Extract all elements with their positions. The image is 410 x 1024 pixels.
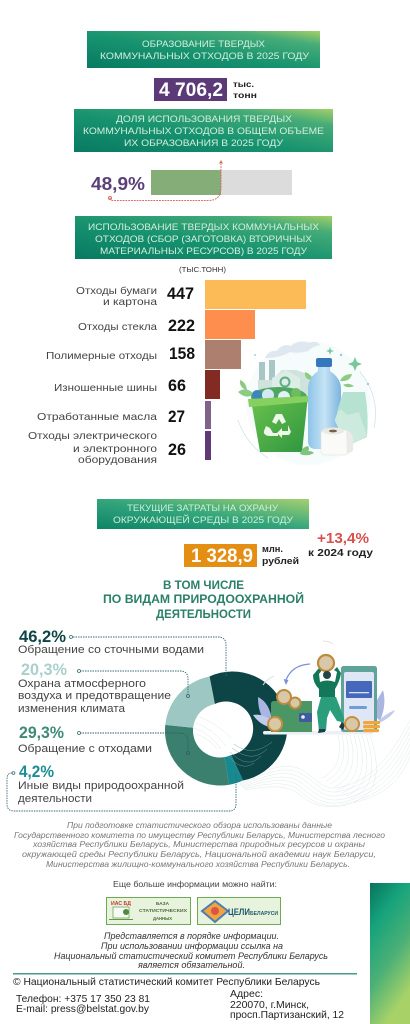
stat: 1 328,9 million roubles: млн. xyxy=(262,544,283,554)
row: glass: 222 xyxy=(168,316,195,335)
logo: statistics database: СТАТИСТИЧЕСКИХ xyxy=(139,908,187,913)
decorative green side panel xyxy=(370,883,410,1024)
stat: 4 706,2 thousand tonnes: тыс. xyxy=(233,79,254,89)
row: oils: Отработанные масла xyxy=(37,411,157,423)
header: environmental costs: ОКРУЖАЮЩЕЙ СРЕДЫ В 2025 ГОДУ xyxy=(113,514,293,525)
header: share of waste use: КОММУНАЛЬНЫХ ОТХОДОВ В ОБЩЕМ ОБЪЕМЕ xyxy=(83,126,324,137)
text block: data sources xyxy=(14,820,385,869)
row: polymers: 158 xyxy=(169,344,195,363)
header: use of secondary materials: МАТЕРИАЛЬНЫХ РЕСУРСОВ) В 2025 ГОДУ xyxy=(100,246,308,257)
contacts: phone and email: E-mail: press@belstat.gov.by xyxy=(16,1003,150,1015)
header: share of waste use: ДОЛЯ ИСПОЛЬЗОВАНИЯ ТВЕРДЫХ xyxy=(116,114,293,125)
logo: sustainable development goals xyxy=(198,898,280,924)
header: use of secondary materials: ОТХОДОВ (СБОР (ЗАГОТОВКА) ВТОРИЧНЫХ xyxy=(95,234,313,245)
subheading: by type of activity xyxy=(103,578,304,621)
callout: atmosphere 20,3%: изменения климата xyxy=(18,703,126,715)
header: environmental costs: ТЕКУЩИЕ ЗАТРАТЫ НА ОХРАНУ xyxy=(127,503,278,513)
callout: wastewater 46,2%: 46,2% xyxy=(19,628,66,646)
row: tyres: 66 xyxy=(168,376,186,395)
unit note: (ТЫС.ТОНН) xyxy=(179,265,227,274)
logo: statistics database: ДАННЫХ xyxy=(153,916,172,921)
row: paper: Отходы бумаги xyxy=(76,285,157,297)
text block: usage note xyxy=(54,931,328,971)
text: more information: Еще больше информации можно найти: xyxy=(113,879,277,889)
row: paper: 447 xyxy=(167,284,194,303)
copyright: © Национальный статистический комитет Республики Беларусь xyxy=(13,976,321,988)
logo: statistics database: БАЗА xyxy=(156,901,170,906)
contacts: address: 220070, г.Минск, xyxy=(230,999,309,1011)
header: waste generation: КОММУНАЛЬНЫХ ОТХОДОВ В 2025 ГОДУ xyxy=(100,51,310,62)
header: share of waste use xyxy=(74,109,333,152)
row: paper xyxy=(76,280,306,309)
donut chart: environmental costs xyxy=(165,671,287,786)
header: environmental costs xyxy=(97,499,309,529)
row: electronics xyxy=(28,430,211,466)
logo: statistics database: ИАС БД xyxy=(111,901,131,907)
footer rule xyxy=(13,973,357,974)
callout: wastewater 46,2%: Обращение со сточными водами xyxy=(18,644,204,656)
stat: 1 328,9 million roubles: 1 328,9 xyxy=(191,546,253,567)
stat: 4 706,2 thousand tonnes: тонн xyxy=(233,90,257,100)
callout: other activities 4,2%: Иные виды природоохранной xyxy=(18,780,184,792)
callout: waste 29,3%: 29,3% xyxy=(19,724,64,742)
stat: 4 706,2 thousand tonnes xyxy=(154,78,257,101)
callout: atmosphere 20,3%: Охрана атмосферного xyxy=(18,678,146,690)
logo: statistics database xyxy=(106,898,190,924)
decorative wave lines xyxy=(240,720,410,807)
illustration: person, wallet and phone with coins xyxy=(253,641,395,734)
row: electronics: 26 xyxy=(168,440,186,459)
subheading: by type of activity: ПО ВИДАМ ПРИРОДООХРАННОЙ xyxy=(103,591,304,606)
subheading: by type of activity: В ТОМ ЧИСЛЕ xyxy=(163,578,244,592)
row: polymers: Полимерные отходы xyxy=(46,350,157,362)
row: paper: и картона xyxy=(103,296,157,308)
text block: usage note: Представляется в порядке информации. xyxy=(104,931,279,942)
progress bar: 48,9%: 48,9% xyxy=(91,173,145,194)
callout: atmosphere 20,3%: 20,3% xyxy=(21,661,67,679)
row: tyres: Изношенные шины xyxy=(54,382,157,394)
text block: usage note: Национальный статистический комитет Республики Беларусь xyxy=(54,951,328,962)
stat: growth +13,4% xyxy=(308,530,373,559)
callout: wastewater 46,2% xyxy=(18,628,226,676)
callout: other activities 4,2% xyxy=(7,763,236,811)
contacts: address xyxy=(230,988,344,1021)
row: tyres xyxy=(54,370,220,399)
header: waste generation: ОБРАЗОВАНИЕ ТВЕРДЫХ xyxy=(142,39,266,50)
row: polymers xyxy=(46,340,241,369)
stat: 4 706,2 thousand tonnes: 4 706,2 xyxy=(159,80,223,101)
stat: growth +13,4%: к 2024 году xyxy=(308,547,373,559)
header: use of secondary materials xyxy=(75,216,332,259)
row: oils: 27 xyxy=(168,407,185,426)
contacts: phone and email xyxy=(16,993,150,1015)
illustration: recycling bin, bottle and factory xyxy=(238,341,376,465)
row: glass xyxy=(78,310,255,339)
header: waste generation xyxy=(87,31,320,68)
text block: data sources: Министерства жилищно-коммунального хозяйства Республики Беларусь. xyxy=(46,859,350,869)
row: oils xyxy=(37,401,211,429)
callout: waste 29,3%: Обращение с отходами xyxy=(18,743,152,755)
text block: data sources: окружающей среды Республики Беларусь, Национальной академии наук Беларуси, xyxy=(22,849,376,859)
logo: sustainable development goals: БЕЛАРУСИ xyxy=(250,911,278,917)
contacts: phone and email: Телефон: +375 17 350 23 81 xyxy=(16,993,150,1005)
bar chart: secondary materials xyxy=(28,280,306,466)
progress bar: 48,9% xyxy=(91,160,292,200)
header: share of waste use: ИХ ОБРАЗОВАНИЯ В 2025 ГОДУ xyxy=(124,138,284,149)
stat: 1 328,9 million roubles xyxy=(184,544,299,567)
contacts: address: Адрес: xyxy=(230,988,263,1000)
text block: data sources: При подготовке статистического обзора использованы данные xyxy=(67,820,332,830)
stat: growth +13,4%: +13,4% xyxy=(317,530,369,547)
row: electronics: оборудования xyxy=(78,454,157,466)
callout: other activities 4,2%: 4,2% xyxy=(19,763,54,781)
text block: usage note: является обязательной. xyxy=(137,960,245,971)
callout: atmosphere 20,3% xyxy=(18,661,190,715)
contacts: address: просп.Партизанский, 12 xyxy=(230,1009,344,1021)
row: electronics: и электронного xyxy=(73,443,157,455)
row: glass: Отходы стекла xyxy=(78,321,157,333)
text block: usage note: При использовании информации ссылка на xyxy=(101,941,283,952)
callout: atmosphere 20,3%: воздуха и предотвращение xyxy=(18,690,171,702)
subheading: by type of activity: ДЕЯТЕЛЬНОСТИ xyxy=(156,607,251,621)
text block: data sources: Государственного комитета по имуществу Республики Беларусь, Министерства лесного xyxy=(14,830,385,840)
header: use of secondary materials: ИСПОЛЬЗОВАНИЕ ТВЕРДЫХ КОММУНАЛЬНЫХ xyxy=(88,222,320,233)
callout: waste 29,3% xyxy=(18,724,190,755)
text block: data sources: хозяйства Республики Беларусь, Министерства природных ресурсов и охраны xyxy=(32,839,366,849)
logo: sustainable development goals: ЦЕЛИ xyxy=(228,907,250,917)
row: electronics: Отходы электрического xyxy=(28,430,157,442)
callout: other activities 4,2%: деятельности xyxy=(18,793,92,805)
stat: 1 328,9 million roubles: рублей xyxy=(262,556,299,566)
